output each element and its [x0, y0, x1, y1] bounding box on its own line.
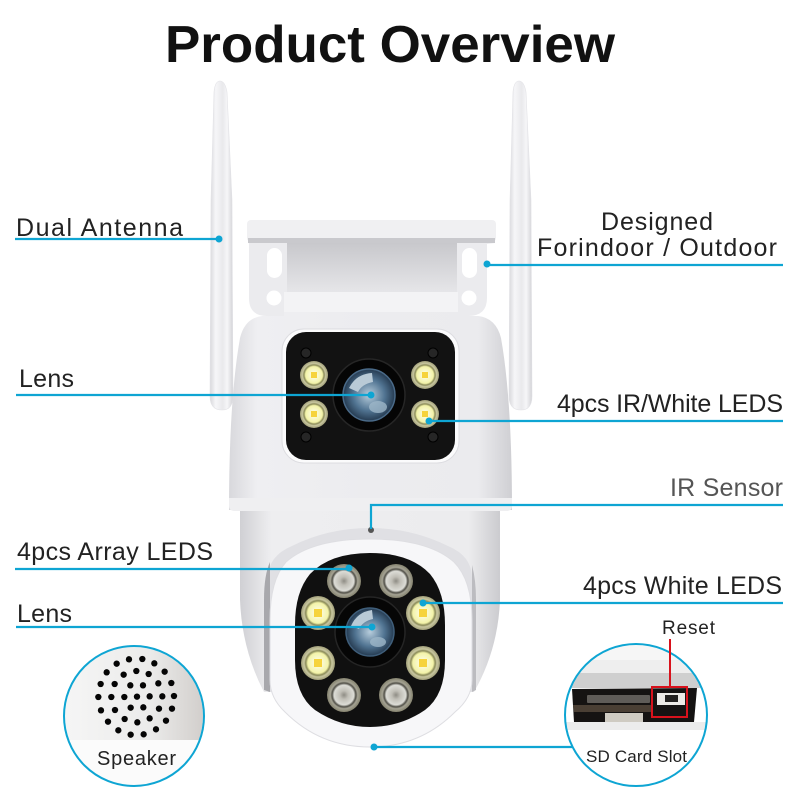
speaker label: Speaker — [97, 748, 176, 770]
callout: IR sensor: IR Sensor — [670, 474, 783, 502]
callout: designed for indoor / outdoor: Forindoor / Outdoor — [537, 234, 777, 262]
callout: white LEDs: 4pcs White LEDS — [583, 572, 782, 600]
lower lens — [335, 597, 405, 667]
wall bracket — [247, 220, 496, 316]
upper black panel — [282, 329, 459, 463]
camera illustration — [210, 81, 532, 747]
callout: IR sensor — [371, 474, 783, 529]
SD card slot label: SD Card Slot — [586, 747, 687, 766]
callout: IR/white LEDs — [426, 390, 783, 424]
callout: dual antenna: Dual Antenna — [16, 214, 183, 242]
left antenna — [210, 81, 233, 410]
reset highlight — [652, 687, 687, 717]
upper LEDs — [300, 361, 439, 428]
dome right slit — [472, 565, 476, 692]
lower dome housing — [240, 511, 500, 692]
callout: upper lens: Lens — [19, 365, 74, 393]
upper screws — [301, 348, 438, 442]
right antenna — [509, 81, 532, 410]
upper lens — [333, 359, 405, 431]
reset label: Reset — [662, 618, 716, 639]
dome side slits — [264, 562, 270, 692]
title: Product Overview — [165, 16, 616, 74]
panel: speaker — [63, 645, 205, 787]
lower white LEDs — [301, 596, 440, 680]
lower grey array LEDs — [327, 564, 413, 712]
callout: array LEDs: 4pcs Array LEDS — [17, 538, 213, 566]
callout line: SD card slot — [370, 744, 572, 750]
dome recess — [268, 528, 472, 692]
upper camera body — [229, 312, 512, 510]
speaker holes — [95, 656, 177, 738]
callout: designed for indoor / outdoor — [484, 208, 783, 268]
callout: lower lens — [16, 600, 376, 630]
callout: IR/white LEDs: 4pcs IR/White LEDS — [557, 390, 783, 418]
callout: lower lens: Lens — [17, 600, 72, 628]
IR sensor dot — [368, 527, 374, 533]
panel: SD card slot — [560, 618, 716, 786]
reset leader line — [669, 639, 671, 687]
callout: array LEDs — [15, 538, 352, 572]
callout: designed for indoor / outdoor: Designed — [601, 208, 713, 236]
lower black panel — [295, 553, 445, 727]
callout: white LEDs — [420, 572, 783, 606]
lower front ring — [270, 539, 472, 747]
callout: upper lens — [16, 365, 374, 398]
